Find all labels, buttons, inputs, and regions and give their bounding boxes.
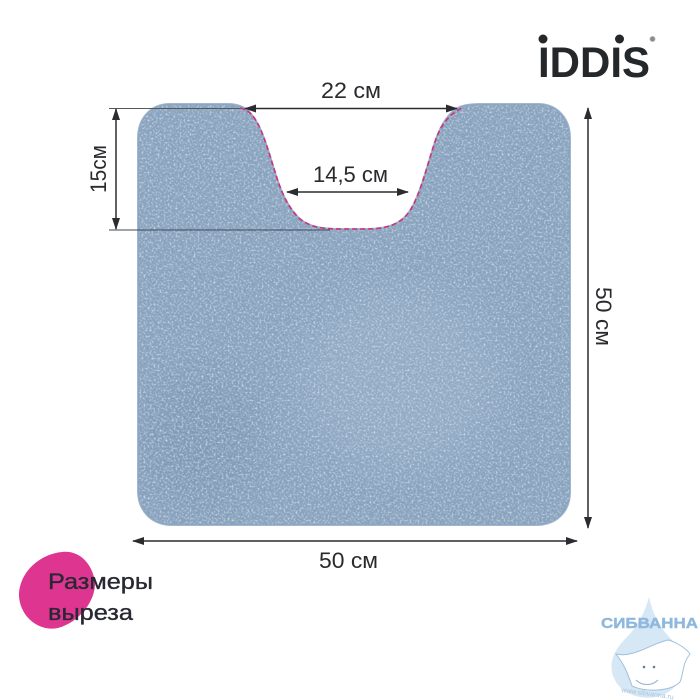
dimension: 15 cm: 15см <box>86 145 111 193</box>
dimension: 22 cm: 22 см <box>321 78 381 103</box>
callout: cutout dimensions: Размеры <box>48 569 153 594</box>
dimension: 14,5 cm <box>287 162 408 192</box>
callout: cutout dimensions <box>19 552 153 629</box>
logo: IDDIS: IDDIS <box>538 39 650 87</box>
logo: Sibvanna watermark <box>601 597 699 700</box>
dimension: 14,5 cm: 14,5 см <box>313 162 388 187</box>
panel: bath mat <box>138 104 570 525</box>
notch dashed outline <box>240 108 462 229</box>
dimension: 50 cm width: 50 см <box>319 548 378 573</box>
logo: Sibvanna watermark: СИБВАННА <box>601 616 699 632</box>
callout: cutout dimensions: выреза <box>48 600 134 625</box>
dimension: 50 cm height: 50 см <box>591 287 616 346</box>
